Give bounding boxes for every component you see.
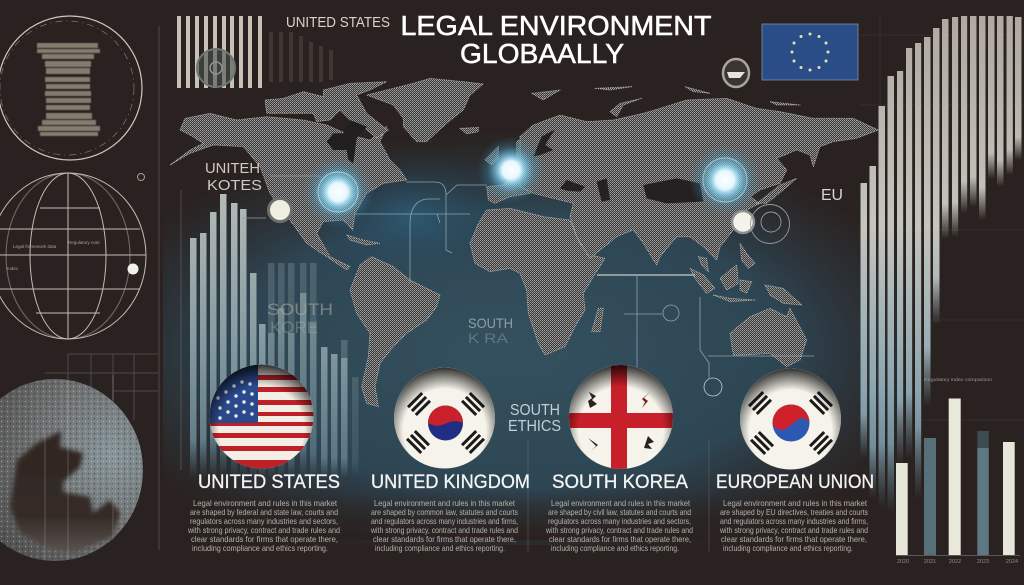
text block: Legal environment and rules in this market	[723, 498, 868, 508]
column: united kingdom	[370, 471, 530, 553]
column: united states	[187, 471, 340, 553]
text block: clear standards for firms that operate there,	[721, 534, 867, 544]
icon: small dial	[723, 59, 749, 87]
label: south ra	[468, 315, 513, 346]
north america	[170, 78, 537, 270]
sphere grid overlay	[45, 375, 113, 560]
icon: tiny seal	[138, 174, 144, 180]
globe microtext	[7, 240, 100, 271]
text block: are shaped by common law, statutes and courts	[371, 507, 518, 517]
right bar chart	[860, 16, 1022, 515]
label: south kore: SOUTH	[267, 300, 333, 319]
greenland	[367, 78, 483, 142]
heading: UNITED KINGDOM	[371, 471, 530, 493]
text block: including compliance and ethics reporting.	[375, 543, 505, 553]
map connector lines	[242, 176, 814, 396]
text block: are shaped by federal and state law, courts and	[190, 507, 338, 517]
label: south kore: KORE	[270, 318, 318, 337]
heading: UNITED STATES	[198, 471, 340, 493]
column: south korea	[545, 471, 693, 553]
united kingdom	[485, 147, 498, 165]
south america	[350, 257, 440, 407]
seas	[533, 129, 703, 203]
text block: Legal environment and rules in this market	[374, 498, 516, 508]
panel: left circle with column icon	[0, 16, 142, 160]
label: south ethics: SOUTH	[510, 402, 560, 419]
globe microtext: Legal framework data	[13, 244, 57, 249]
text block: clear standards for firms that operate there,	[191, 534, 338, 544]
text block: with strong privacy, contract and trade rules and	[370, 525, 518, 535]
text block	[719, 498, 868, 553]
western europe	[487, 133, 537, 203]
axis labels	[897, 559, 1018, 565]
hotspot: north america glow	[302, 156, 374, 228]
text block: regulators across many industries and sectors,	[190, 516, 338, 526]
text block: with strong privacy, contract and trade rules and	[187, 525, 340, 535]
label: eu: EU	[821, 187, 843, 204]
panel: shaded earth sphere	[0, 375, 150, 565]
flag: red cross	[569, 365, 673, 469]
label: south kore	[267, 300, 333, 337]
flag: south korea second	[740, 368, 841, 470]
icon: EU flag	[762, 24, 858, 80]
label: south ethics	[508, 402, 561, 435]
globe microtext: Regulatory note	[68, 240, 100, 245]
icon: stacked column	[37, 43, 100, 136]
axis labels: 2024	[1006, 559, 1018, 565]
text block: clear standards for firms that operate there,	[373, 534, 516, 544]
panel: world map	[170, 78, 878, 407]
decorative top-left bars	[177, 16, 333, 88]
panel: wireframe globe	[0, 173, 146, 339]
label: uniteh kotes: KOTES	[207, 177, 262, 194]
heading: EUROPEAN UNION	[716, 471, 874, 493]
text block: clear standards for firms that operate there,	[549, 534, 691, 544]
text block: Legal environment and rules in this market	[551, 498, 691, 508]
axis labels: 2022	[949, 559, 961, 565]
label: south ra: K RA	[468, 330, 509, 346]
label: uniteh kotes: UNITEH	[205, 160, 260, 177]
title: LEGAL ENVIRONMENT	[400, 10, 712, 41]
label: uniteh kotes	[205, 160, 262, 194]
hotspot: asia glow	[689, 144, 761, 216]
title: GLOBAALLY	[460, 38, 624, 69]
text block	[545, 498, 693, 553]
flag: united states	[210, 364, 314, 468]
text block: including compliance and ethics reporting.	[723, 543, 853, 553]
icon: ring on bars	[197, 49, 235, 87]
text block	[187, 498, 340, 553]
axis labels: 2021	[924, 559, 936, 565]
title	[400, 10, 712, 69]
marker: white node east with rings	[732, 204, 790, 244]
small bar chart	[896, 377, 1020, 565]
text block	[370, 498, 518, 553]
hudson bay	[327, 120, 367, 163]
left bar chart	[190, 194, 358, 478]
chart caption: Regulatory index comparison	[924, 377, 993, 382]
text block: with strong privacy, contract and trade rules and	[719, 525, 868, 535]
text block: regulators across many industries and sectors,	[548, 516, 691, 526]
text block: Legal environment and rules in this market	[193, 498, 338, 508]
label: south ethics: ETHICS	[508, 418, 561, 435]
hotspot: europe glow	[477, 136, 545, 204]
axis labels: 2023	[977, 559, 989, 565]
axis labels: 2020	[897, 559, 909, 565]
text block: are shaped by civil law, statutes and courts and	[548, 507, 691, 517]
icon: white dot on globe	[128, 264, 138, 274]
text block: with strong privacy, contract and trade rules and	[545, 525, 693, 535]
eurasia	[520, 87, 878, 265]
africa and oceania	[470, 208, 807, 367]
label: united states top: UNITED STATES	[286, 15, 390, 31]
label: south ra: SOUTH	[468, 315, 513, 331]
text block: including compliance and ethics reporting.	[192, 543, 328, 553]
text block: and regulators across many industries and firms,	[371, 516, 518, 526]
marker: white node west	[268, 198, 292, 222]
heading: SOUTH KOREA	[552, 471, 688, 493]
text block: and regulators across many industries and firms,	[720, 516, 868, 526]
column: european union	[716, 471, 874, 553]
globe microtext: Index	[7, 266, 19, 271]
text block: including compliance and ethics reporting.	[551, 543, 679, 553]
text block: are shaped by EU directives, treaties and courts	[720, 507, 868, 517]
flag: south korea	[394, 368, 495, 468]
